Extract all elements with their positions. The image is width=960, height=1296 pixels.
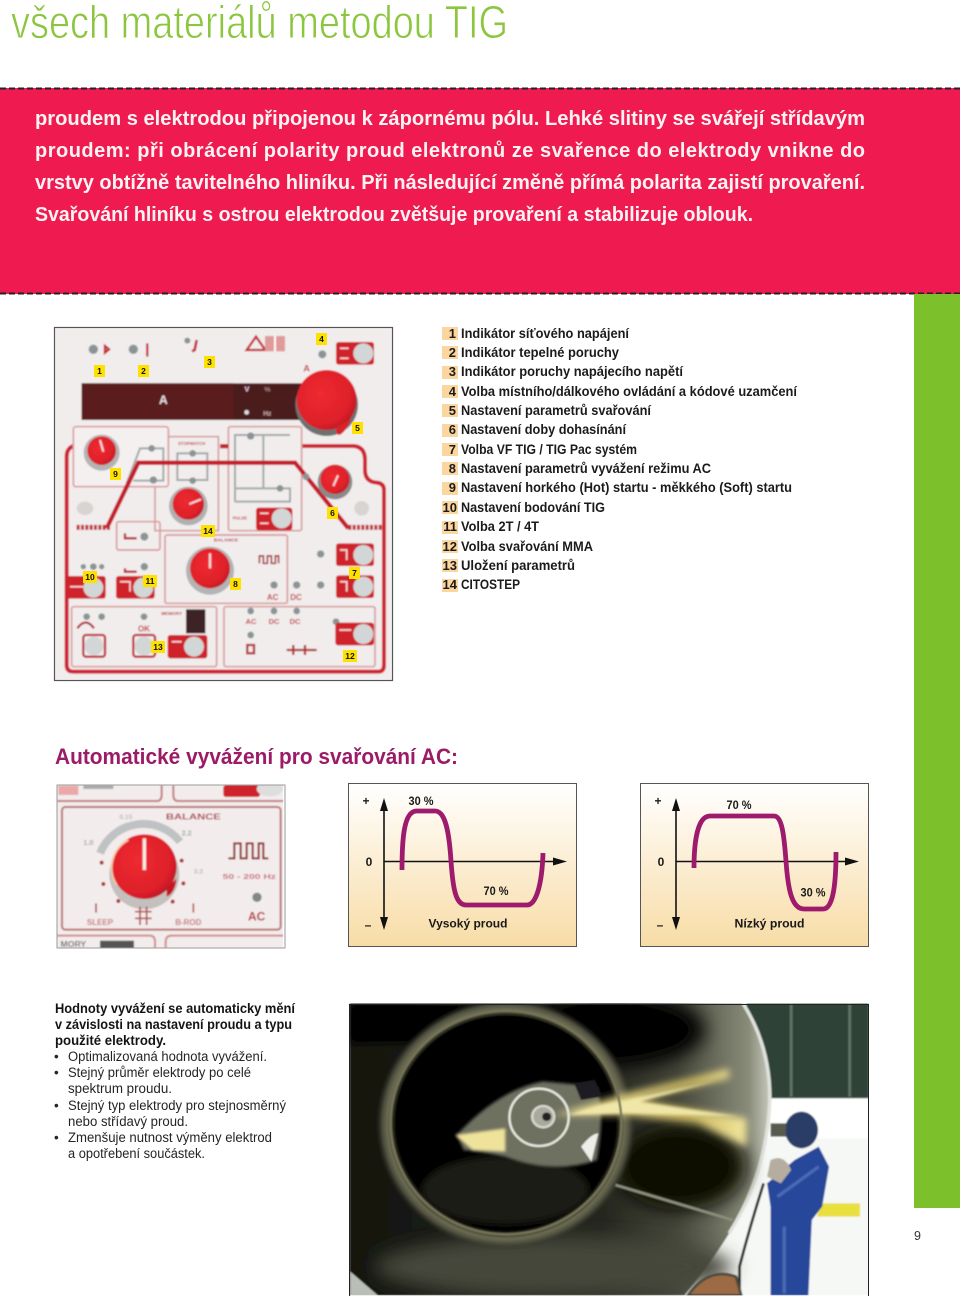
- numbered legend list: 10: [443, 500, 457, 515]
- panel: balance knob photo: B-ROD: [175, 918, 202, 927]
- numbered legend list: 1: [449, 326, 456, 341]
- panel: welder control panel photo: DC: [290, 593, 302, 602]
- numbered legend list: 2: [449, 345, 456, 360]
- panel: welder control panel photo: %: [264, 386, 270, 393]
- yellow equipment: [817, 1203, 860, 1217]
- green side bar: [914, 294, 960, 1208]
- numbered legend list: Nastavení horkého (Hot) startu - měkkého (Soft) startu: [461, 480, 792, 495]
- numbered legend list: Volba místního/dálkového ovládání a kódové uzamčení: [461, 384, 798, 399]
- panel: welder control panel photo: DC: [289, 617, 301, 626]
- chart: high current waveform: [348, 784, 576, 946]
- numbered legend list: Indikátor síťového napájení: [461, 326, 630, 341]
- numbered legend list: Volba svařování MMA: [461, 539, 593, 554]
- panel labels: numbered yellow tags: 3: [207, 357, 212, 367]
- text block: balance notes: •: [54, 1065, 59, 1080]
- panel: welder control panel photo: Hz: [263, 410, 272, 417]
- panel: balance knob photo: AC: [248, 910, 266, 924]
- numbered legend list: Nastavení parametrů svařování: [461, 403, 652, 418]
- page number: 9: [914, 1229, 921, 1243]
- text block: balance notes: použité elektrody.: [55, 1033, 166, 1048]
- panel: balance knob photo: 3.3: [194, 868, 203, 875]
- numbered legend list: Uložení parametrů: [461, 558, 575, 573]
- welder figure: [740, 1112, 829, 1295]
- vertical axis: [380, 798, 388, 930]
- panel: red intro banner: proudem: při obrácení polarity proud elektronů ze svařence do elektrody vnikne do: [35, 140, 865, 162]
- chart: low current waveform: Nízký proud: [734, 916, 804, 930]
- chart: low current waveform: –: [657, 918, 664, 932]
- panel: red intro banner: vrstvy obtížně tavitelného hliníku. Při následující změně přímá polarita zajistí provaření.: [35, 172, 865, 194]
- chart: low current waveform: [640, 784, 868, 946]
- panel labels: numbered yellow tags: 6: [330, 508, 335, 518]
- panel labels: numbered yellow tags: 5: [355, 423, 360, 433]
- numbered legend list: [442, 326, 798, 592]
- panel labels: numbered yellow tags: 12: [345, 651, 355, 661]
- numbered legend list: 9: [449, 480, 456, 495]
- numbered legend list: CITOSTEP: [461, 577, 520, 592]
- vertical axis: [672, 798, 680, 930]
- panel: balance knob photo: MORY: [61, 939, 86, 949]
- text block: balance notes: [54, 1001, 296, 1161]
- panel: welder control panel photo: PULSE: [233, 515, 247, 520]
- numbered legend list: 3: [449, 364, 456, 379]
- panel: welder control panel photo: A: [303, 364, 310, 374]
- weld flash light streak: [455, 1068, 746, 1167]
- panel labels: numbered yellow tags: 9: [113, 469, 118, 479]
- panel labels: numbered yellow tags: 14: [203, 526, 213, 536]
- numbered legend list: 13: [443, 558, 457, 573]
- numbered legend list: 6: [449, 422, 456, 437]
- panel: welder control panel photo: A: [159, 393, 168, 407]
- panel: balance knob photo: 50 - 200 Hz: [223, 872, 276, 881]
- panel: balance knob photo: SLEEP: [87, 918, 114, 927]
- waveform: [694, 816, 836, 909]
- panel: balance knob photo: 0.15: [120, 814, 133, 821]
- panel: red intro banner: proudem s elektrodou připojenou k zápornému pólu. Lehké slitiny se svářejí střídavým: [35, 108, 865, 130]
- panel: welder control panel photo: DC: [268, 617, 280, 626]
- numbered legend list: Nastavení parametrů vyvážení režimu AC: [461, 461, 711, 476]
- panel: welder control panel photo: V: [245, 384, 250, 393]
- chart: high current waveform: Vysoký proud: [428, 916, 508, 930]
- pipe opening: [376, 998, 636, 1250]
- shutter door background: [746, 1003, 869, 1138]
- numbered legend list: Nastavení doby dohasínání: [461, 422, 627, 437]
- numbered legend list: Volba 2T / 4T: [461, 519, 540, 534]
- text block: balance notes: a opotřebení součástek.: [68, 1146, 205, 1161]
- numbered legend list: 5: [449, 403, 456, 418]
- numbered legend list: 11: [443, 519, 457, 534]
- chart: low current waveform: 0: [658, 855, 665, 869]
- chart: low current waveform: 70 %: [726, 798, 752, 812]
- chart: high current waveform: 0: [366, 855, 373, 869]
- numbered legend list: 12: [443, 539, 457, 554]
- panel: welder control panel photo: MEMORY: [161, 611, 183, 616]
- panel: red intro banner: [0, 88, 960, 294]
- text block: balance notes: •: [54, 1098, 59, 1113]
- panel: balance knob photo: 1.0: [83, 838, 93, 847]
- numbered legend list: 14: [443, 577, 458, 592]
- text block: balance notes: Stejný typ elektrody pro stejnosměrný: [68, 1098, 286, 1113]
- panel labels: numbered yellow tags: 13: [153, 642, 163, 652]
- numbered legend list: Nastavení bodování TIG: [461, 500, 605, 515]
- chart: low current waveform: +: [654, 794, 662, 808]
- chart: high current waveform: 70 %: [484, 884, 509, 898]
- text block: balance notes: •: [54, 1049, 59, 1064]
- panel labels: numbered yellow tags: 10: [85, 572, 95, 582]
- chart: low current waveform: 30 %: [800, 886, 826, 900]
- text block: balance notes: Optimalizovaná hodnota vyvážení.: [68, 1049, 267, 1064]
- panel: red intro banner: Svařování hliníku s ostrou elektrodou zvětšuje provaření a stabilizuje oblouk.: [35, 204, 753, 226]
- numbered legend list: Indikátor tepelné poruchy: [461, 345, 619, 360]
- panel labels: numbered yellow tags: 7: [352, 568, 357, 578]
- panel labels: numbered yellow tags: [83, 333, 363, 662]
- numbered legend list: Volba VF TIG / TIG Pac systém: [461, 442, 637, 457]
- panel: balance knob photo: BALANCE: [166, 812, 221, 822]
- panel labels: numbered yellow tags: 2: [141, 366, 146, 376]
- waveform: [402, 811, 543, 905]
- panel: balance knob photo: [57, 782, 285, 949]
- chart: high current waveform: +: [362, 794, 370, 808]
- heading: automatic balance: Automatické vyvážení pro svařování AC:: [55, 744, 458, 769]
- chart: high current waveform: –: [365, 918, 372, 932]
- text block: balance notes: spektrum proudu.: [68, 1081, 172, 1096]
- numbered legend list: Indikátor poruchy napájecího napětí: [461, 364, 684, 379]
- panel: balance knob photo: 2.2: [182, 829, 192, 838]
- panel: welder control panel photo: [54, 328, 392, 680]
- numbered legend list: 7: [449, 442, 456, 457]
- panel labels: numbered yellow tags: 8: [233, 579, 238, 589]
- panel: welder control panel photo: OK: [138, 625, 150, 634]
- panel: welder control panel photo: BALANCE: [214, 538, 239, 544]
- panel labels: numbered yellow tags: 11: [146, 576, 155, 586]
- text block: balance notes: •: [54, 1130, 59, 1145]
- panel labels: numbered yellow tags: 1: [97, 366, 102, 376]
- numbered legend list: 8: [449, 461, 456, 476]
- text block: balance notes: nebo střídavý proud.: [68, 1114, 188, 1129]
- text block: balance notes: Stejný průměr elektrody po celé: [68, 1065, 251, 1080]
- panel: welder control panel photo: STOPWATCH: [178, 441, 205, 446]
- numbered legend list: 4: [449, 384, 457, 399]
- panel labels: numbered yellow tags: 4: [319, 334, 324, 344]
- chart: high current waveform: 30 %: [408, 794, 434, 808]
- text block: balance notes: Hodnoty vyvážení se automaticky mění: [55, 1001, 296, 1016]
- text block: balance notes: v závislosti na nastavení proudu a typu: [55, 1017, 292, 1032]
- panel: welder control panel photo: AC: [267, 593, 279, 602]
- panel: welder control panel photo: AC: [245, 617, 257, 626]
- text block: balance notes: Zmenšuje nutnost výměny elektrod: [68, 1130, 272, 1145]
- photo: welder inside tank: [350, 993, 869, 1296]
